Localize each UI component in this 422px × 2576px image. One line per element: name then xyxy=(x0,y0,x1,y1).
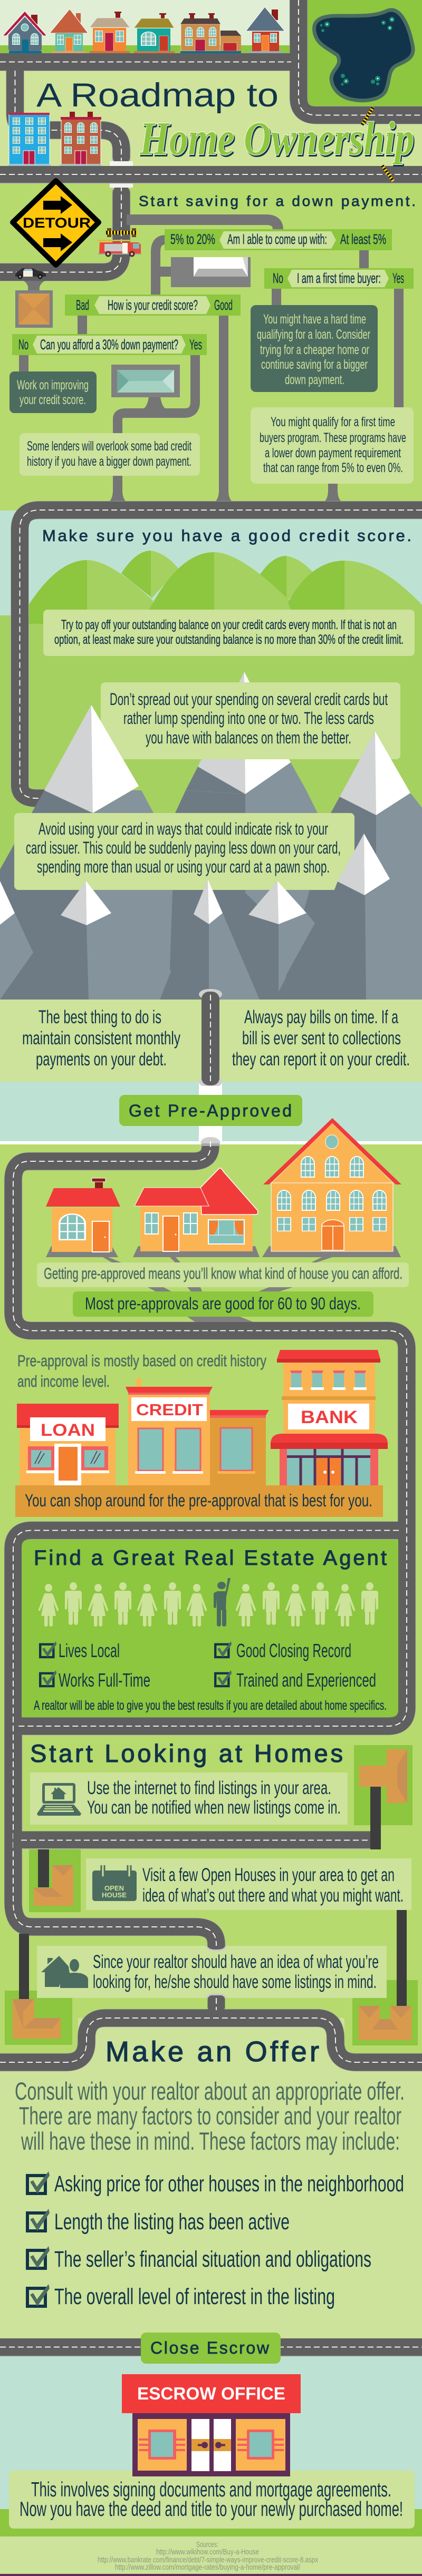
tip: maintain consistent payments: payments on your debt. xyxy=(36,1049,167,1070)
road: upper street network xyxy=(0,0,422,166)
callout: hard time qualifying: trying for a cheaper home or xyxy=(260,342,369,357)
callout: hard time qualifying: continue saving for a bigger xyxy=(261,357,368,372)
heading: make sure you have a good credit score: Make sure you have a good credit score. xyxy=(42,526,411,545)
vehicle: police car xyxy=(15,267,46,279)
callout: lenders will overlook xyxy=(20,433,200,476)
road: through credit tips xyxy=(199,989,222,1086)
callout: first time buyers program xyxy=(251,407,414,484)
building: credit office: CREDIT xyxy=(136,1400,203,1419)
panel: closing statement xyxy=(9,2471,415,2529)
driveways and roofs near the realtor panel xyxy=(5,1910,418,2045)
icon row: people with one raised hand xyxy=(38,1578,378,1627)
rooftop: teal xyxy=(111,365,180,397)
checklist: agent qualities: Works Full-Time xyxy=(59,1669,150,1691)
building: bank xyxy=(271,1350,388,1485)
icon: detour sign xyxy=(13,181,99,265)
decision box: first time buyer: No xyxy=(273,270,283,286)
property: top right roof xyxy=(354,1745,413,1841)
panel: visit open houses xyxy=(86,1858,411,1910)
decision box: thirty percent down payment: Can you afford a 30% down payment? xyxy=(40,337,178,352)
decision box: first time buyer: Yes xyxy=(392,270,404,286)
property: left roof xyxy=(29,1849,81,1912)
sources: http://www.bankrate.com/finance/debt/7-simple-ways-improve-credit-score-8.aspx xyxy=(98,2555,318,2564)
heading: start saving for a down payment: Start saving for a down payment. xyxy=(139,193,416,209)
callout: hard time qualifying xyxy=(251,305,378,392)
banner: close escrow: Close Escrow xyxy=(150,2338,270,2357)
decision box: first time buyer xyxy=(264,268,414,289)
sources: http://www.zillow.com/mortgage-rates/buying-a-home/pre-approval/ xyxy=(115,2563,301,2572)
text: pre-approval basis: and income level. xyxy=(17,1372,110,1390)
panel: find an agent backdrop xyxy=(22,1540,398,1717)
icon: detour sign: DETOUR xyxy=(23,215,91,231)
road: pre-approval loop xyxy=(13,1137,407,1948)
sources xyxy=(98,2540,318,2572)
building: escrow office xyxy=(122,2374,301,2476)
rooftop: orange xyxy=(15,290,53,328)
snow caps overlapping panel two xyxy=(44,705,410,815)
callout: hard time qualifying: down payment. xyxy=(285,373,344,387)
callout: work on improving credit: your credit score. xyxy=(20,393,86,407)
road sign: hazard barriers xyxy=(361,106,395,182)
callout: lenders will overlook: Some lenders will overlook some bad credit xyxy=(27,439,191,454)
house: large xyxy=(262,1118,401,1257)
mountain range: back layer xyxy=(0,672,422,1000)
decision box: credit score xyxy=(65,295,241,316)
title: A Roadmap to xyxy=(36,77,279,114)
snow caps overlapping panel three xyxy=(61,834,390,925)
banner: get pre-approved xyxy=(119,1095,302,1126)
flowchart connectors xyxy=(24,220,399,502)
decision box: credit score: How is your credit score? xyxy=(108,297,198,313)
decision box: down payment: Am I able to come up with: xyxy=(227,231,327,247)
callout: getting pre-approved xyxy=(37,1262,409,1287)
decision box: thirty percent down payment: No xyxy=(18,337,28,352)
paths linking houses to road xyxy=(103,1257,332,1322)
icon: laptop xyxy=(37,1783,81,1816)
road: closing street xyxy=(0,2338,422,2356)
road: main street and lower branch xyxy=(0,166,422,272)
title xyxy=(36,77,414,165)
tip panel: pay off balance xyxy=(43,610,415,656)
callout: lenders will overlook: history if you have a bigger down payment. xyxy=(27,454,191,469)
text: pre-approval basis: Pre-approval is mostly based on credit history xyxy=(17,1351,266,1370)
callout: hard time qualifying: You might have a hard time xyxy=(263,312,366,327)
panel: realtor listings xyxy=(37,1946,387,1998)
brick apartment building xyxy=(60,112,101,166)
checklist: offer factors: Length the listing has been active xyxy=(54,2209,290,2235)
banner: get pre-approved: Get Pre-Approved xyxy=(129,1101,292,1120)
sources: Sources: xyxy=(196,2540,218,2549)
decision box: thirty percent down payment xyxy=(12,334,207,355)
tip panel: avoid risky card use xyxy=(14,813,354,890)
sources: http://www.wikihow.com/Buy-a-House xyxy=(156,2548,259,2557)
tip: maintain consistent payments xyxy=(22,1007,180,1070)
road: street across to credit section xyxy=(20,510,422,798)
checklist: agent qualities xyxy=(40,1640,376,1691)
building: loan office xyxy=(17,1404,119,1485)
icon: open house calendar xyxy=(92,1865,137,1901)
callout: 60 to 90 days xyxy=(73,1291,373,1317)
rooftop: white xyxy=(171,257,251,287)
icon: open house calendar: HOUSE xyxy=(102,1891,127,1899)
icon: house and agent xyxy=(41,1956,88,1988)
heading: find a great real estate agent: Find a Great Real Estate Agent xyxy=(34,1546,387,1570)
checklist: offer factors xyxy=(27,2171,404,2309)
icon: open house calendar: OPEN xyxy=(104,1884,124,1892)
panel: use the internet xyxy=(30,1772,348,1825)
tip panel: don't spread spending xyxy=(101,682,400,759)
vehicle: fire truck and barricade xyxy=(98,228,141,257)
decision box: down payment: 5% to 20% xyxy=(170,231,215,247)
decision box: credit score: Good xyxy=(214,297,233,313)
building: bank: BANK xyxy=(301,1407,358,1427)
building: escrow office: ESCROW OFFICE xyxy=(137,2384,285,2403)
tip: maintain consistent payments: The best thing to do is xyxy=(39,1007,161,1027)
building: loan office: LOAN xyxy=(41,1421,95,1439)
house: medium xyxy=(133,1168,260,1257)
checklist: agent qualities: Good Closing Record xyxy=(236,1640,351,1661)
house 3 xyxy=(90,12,130,53)
callout: work on improving credit xyxy=(9,371,97,413)
decision box: credit score: Bad xyxy=(76,297,89,313)
text: pre-approval basis xyxy=(17,1351,266,1390)
house: small xyxy=(46,1178,120,1257)
icon: pond with lily pads xyxy=(314,10,413,101)
building: middle annex xyxy=(210,1410,269,1485)
house 6 xyxy=(246,7,285,53)
tip: maintain consistent payments: maintain consistent monthly xyxy=(22,1028,180,1049)
house 1 xyxy=(3,11,47,53)
building: credit office xyxy=(126,1377,213,1485)
house 2 xyxy=(50,9,88,53)
row of suburban houses xyxy=(3,7,285,53)
decision box: thirty percent down payment: Yes xyxy=(189,337,202,352)
text: consult with your realtor xyxy=(15,2077,405,2155)
house 4 xyxy=(134,13,175,53)
decision box: down payment xyxy=(165,229,392,250)
road: around make an offer xyxy=(0,1995,422,2062)
base band with shop-around text xyxy=(15,1485,383,1517)
heading: start looking at homes: Start Looking at Homes xyxy=(30,1739,343,1767)
green hills xyxy=(29,551,422,624)
blue apartment building xyxy=(8,113,51,166)
heading: make an offer: Make an Offer xyxy=(106,2036,319,2068)
road: looking at homes street xyxy=(13,1831,381,1849)
decision box: down payment: At least 5% xyxy=(340,231,386,247)
banner: close escrow xyxy=(141,2333,281,2364)
raised-hand agent xyxy=(214,1578,231,1627)
tip: always pay bills on time xyxy=(232,1007,410,1070)
house 5 xyxy=(180,13,241,53)
callout: work on improving credit: Work on improving xyxy=(17,378,89,393)
checklist: agent qualities: Lives Local xyxy=(59,1640,120,1661)
